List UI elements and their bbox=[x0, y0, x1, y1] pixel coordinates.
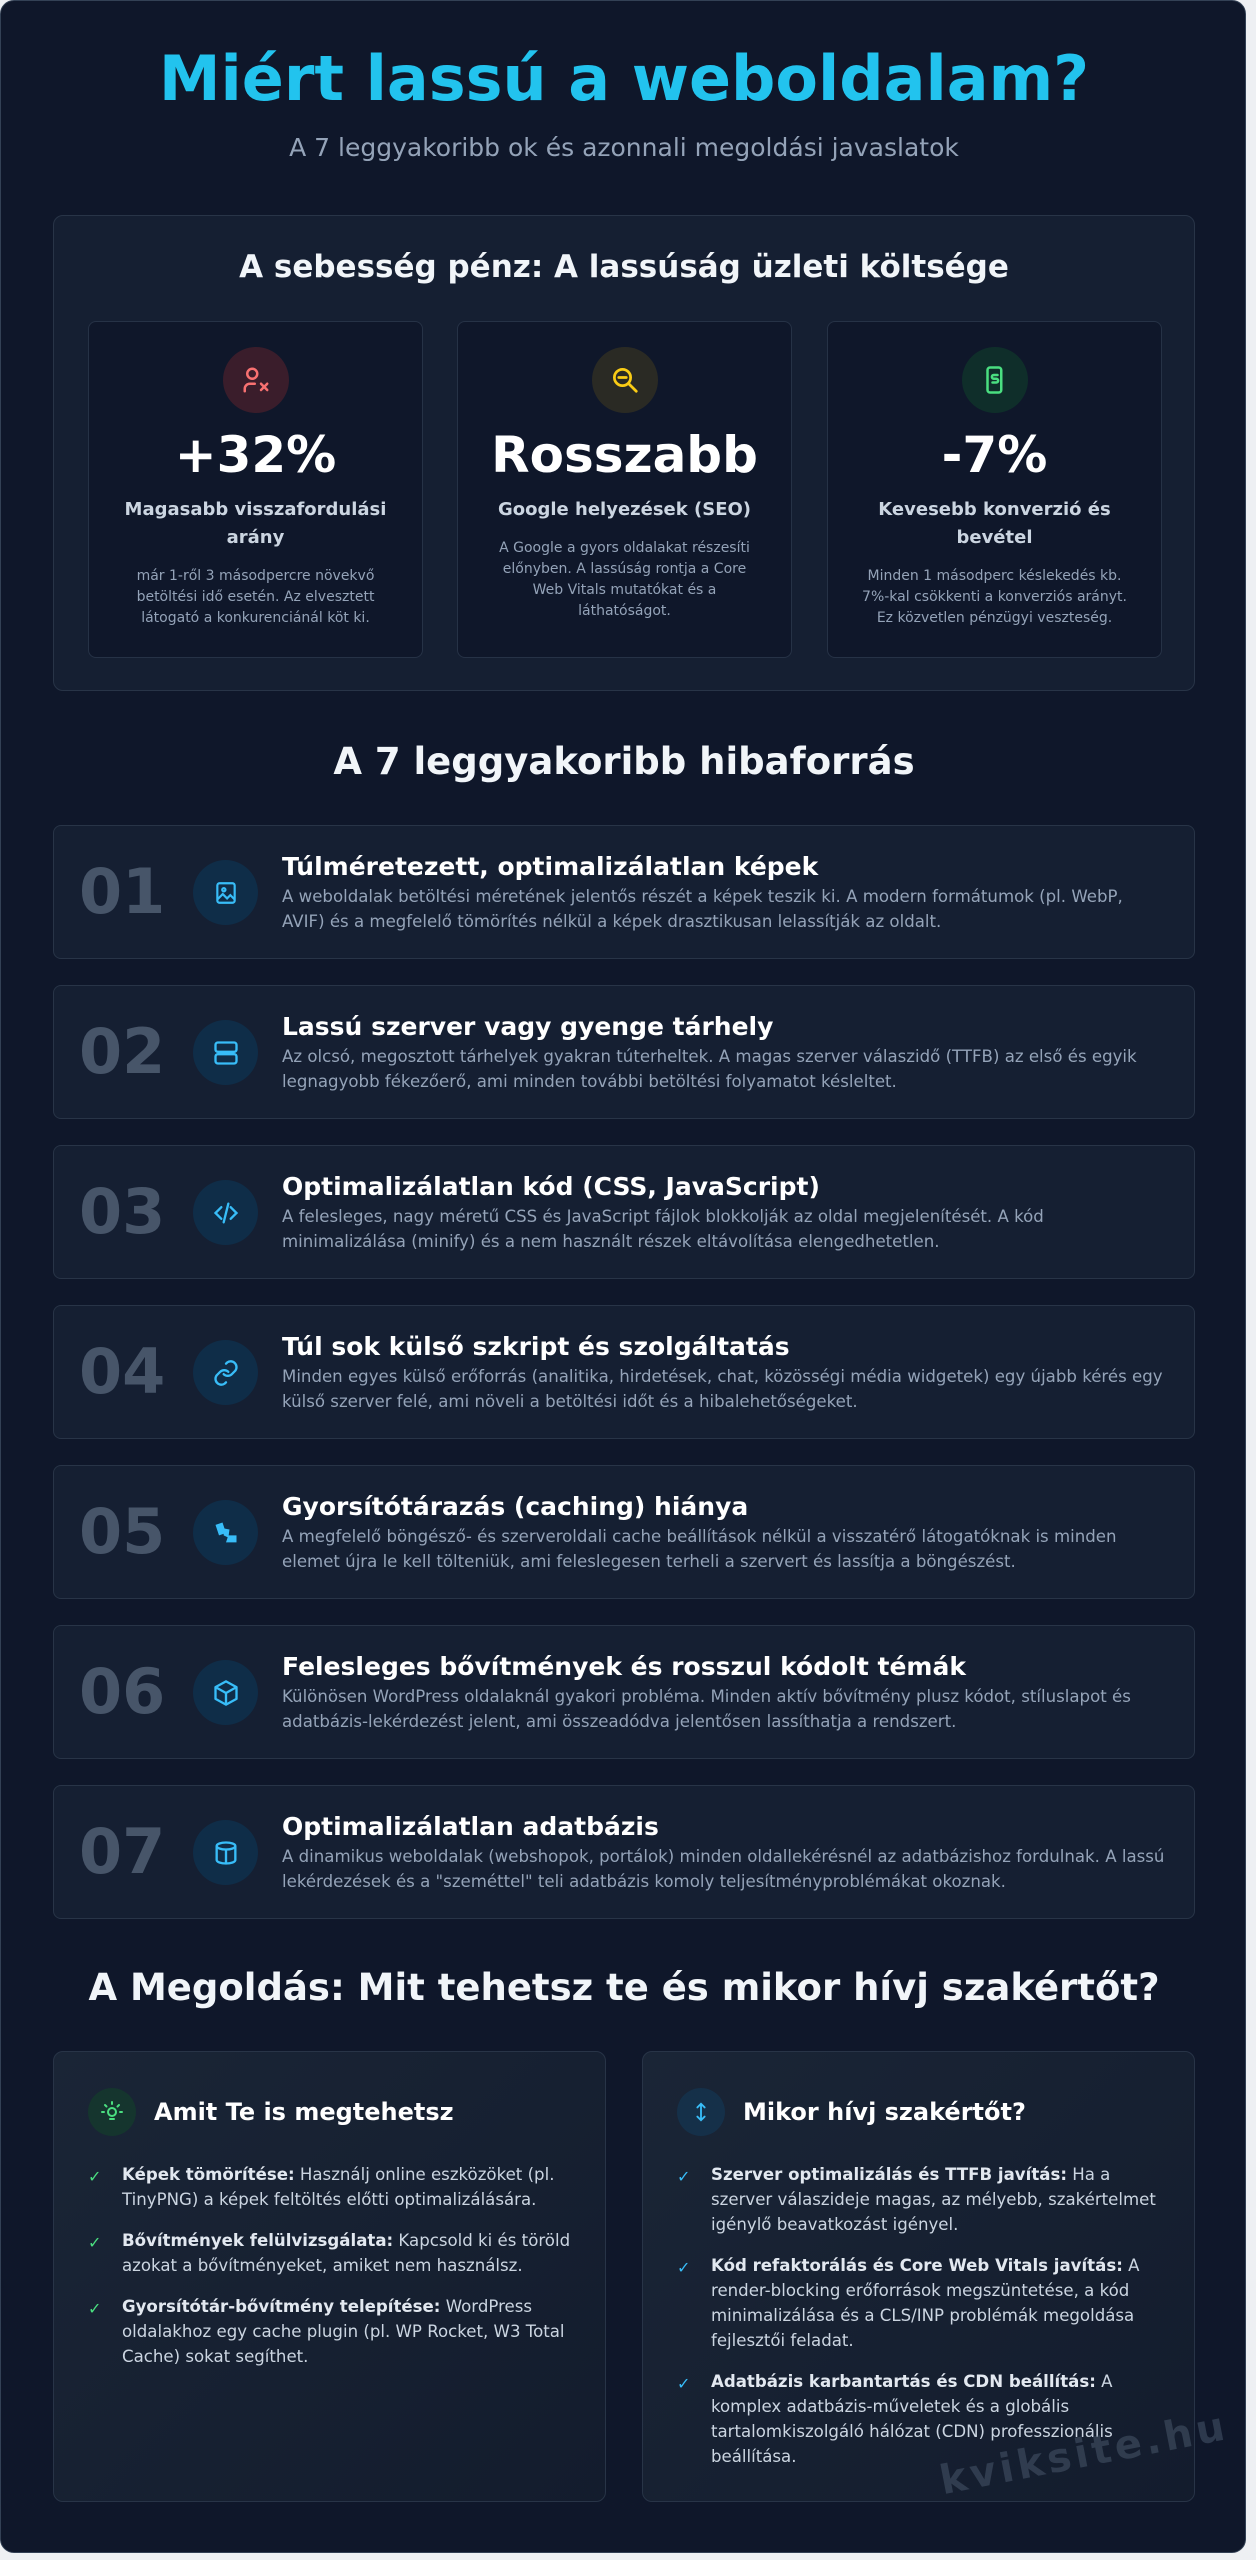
panel: expert: ✓ bbox=[677, 2374, 690, 2393]
item 05: 05 bbox=[79, 1495, 165, 1568]
icon: user x bbox=[223, 347, 289, 413]
item 03: Optimalizálatlan kód (CSS, JavaScript) bbox=[282, 1172, 820, 1201]
item 05: A megfelelő böngésző- és szerveroldali cache beállítások nélkül a visszatérő látogatóknak is minden elemet újra le kell tölteniük, ami feleslegesen terheli a szervert és lassítja a böngészést. bbox=[282, 1527, 1117, 1571]
icon: arrows bbox=[677, 2088, 725, 2136]
stat card: seo: Google helyezések (SEO) bbox=[498, 499, 751, 520]
item 01 bbox=[53, 825, 1195, 959]
item 01: Túlméretezett, optimalizálatlan képek bbox=[282, 852, 818, 881]
icon: image bbox=[193, 860, 258, 925]
stat card: bounce bbox=[88, 321, 423, 658]
item 04: 04 bbox=[79, 1335, 165, 1408]
stat card: bounce: már 1-ről 3 másodpercre növekvő betöltési idő esetén. Az elvesztett látogató a konkurenciánál köt ki. bbox=[137, 568, 374, 626]
panel: diy: ✓ bbox=[88, 2233, 101, 2252]
item 06: 06 bbox=[79, 1655, 165, 1728]
item 05: Gyorsítótárazás (caching) hiánya bbox=[282, 1492, 748, 1521]
stat card: bounce: +32% bbox=[175, 426, 336, 484]
item 07 bbox=[53, 1785, 1195, 1919]
item 01: 01 bbox=[79, 855, 165, 928]
stat card: conversion: -7% bbox=[942, 426, 1047, 484]
icon: bulb bbox=[88, 2088, 136, 2136]
panel: expert: Mikor hívj szakértőt? bbox=[743, 2098, 1026, 2126]
item 02: 02 bbox=[79, 1015, 165, 1088]
icon: code bbox=[193, 1180, 258, 1245]
item 04: Túl sok külső szkript és szolgáltatás bbox=[282, 1332, 790, 1361]
panel: diy: ✓ bbox=[88, 2167, 101, 2186]
item 02: Az olcsó, megosztott tárhelyek gyakran túterheltek. A magas szerver válaszidő (TTFB) az első és egyik legnagyobb fékezőerő, ami minden további betöltési folyamatot késleltet. bbox=[282, 1047, 1137, 1091]
subtitle: A 7 leggyakoribb ok és azonnali megoldási javaslatok bbox=[289, 133, 959, 162]
icon: phone money bbox=[962, 347, 1028, 413]
item 04 bbox=[53, 1305, 1195, 1439]
item 04: Minden egyes külső erőforrás (analitika, hirdetések, chat, közösségi média widgetek) egy újabb kérés egy külső szerver felé, ami növeli a betöltési időt és a hibalehetőségeket. bbox=[282, 1367, 1163, 1411]
watermark: kviksite.hu bbox=[936, 2403, 1232, 2504]
item 02 bbox=[53, 985, 1195, 1119]
panel: diy bbox=[53, 2051, 606, 2502]
panel: diy: Amit Te is megtehetsz bbox=[154, 2098, 454, 2126]
panel: expert: Kód refaktorálás és Core Web Vitals javítás: A render-blocking erőforrások megszüntetése, a kód minimalizálása és a CLS/INP problémák megoldása fejlesztői feladat. bbox=[711, 2256, 1139, 2350]
stat card: conversion: Minden 1 másodperc késlekedés kb. 7%-kal csökkenti a konverziós arányt. Ez közvetlen pénzügyi veszteség. bbox=[862, 568, 1127, 626]
item 03 bbox=[53, 1145, 1195, 1279]
icon: search minus bbox=[592, 347, 658, 413]
panel: expert: Adatbázis karbantartás és CDN beállítás: A komplex adatbázis-műveletek és a globális tartalomkiszolgáló hálózat (CDN) professzionális beállítása. bbox=[711, 2372, 1113, 2466]
icon: link bbox=[193, 1340, 258, 1405]
item 06: Különösen WordPress oldalaknál gyakori probléma. Minden aktív bővítmény plusz kódot, stíluslapot és adatbázis-lekérdezést jelent, ami összeadódva jelentősen lassíthatja a rendszert. bbox=[282, 1687, 1131, 1731]
icon: database bbox=[193, 1820, 258, 1885]
item 01: A weboldalak betöltési méretének jelentős részét a képek teszik ki. A modern formátumok (pl. WebP, AVIF) és a megfelelő tömörítés nélkül a képek drasztikusan lelassítják az oldalt. bbox=[282, 887, 1123, 931]
item 07: A dinamikus weboldalak (webshopok, portálok) minden oldallekérésnél az adatbázishoz fordulnak. A lassú lekérdezések és a "szeméttel" teli adatbázis komoly teljesítményproblémákat okoznak. bbox=[282, 1847, 1164, 1891]
item 07: Optimalizálatlan adatbázis bbox=[282, 1812, 659, 1841]
item 06: Felesleges bővítmények és rosszul kódolt témák bbox=[282, 1652, 966, 1681]
section heading: solution: A Megoldás: Mit tehetsz te és mikor hívj szakértőt? bbox=[88, 1966, 1160, 2009]
item 07: 07 bbox=[79, 1815, 165, 1888]
stat card: seo: A Google a gyors oldalakat részesíti előnyben. A lassúság rontja a Core Web Vitals mutatókat és a láthatóságot. bbox=[499, 540, 750, 619]
icon: server bbox=[193, 1020, 258, 1085]
panel: expert: ✓ bbox=[677, 2258, 690, 2277]
item 02: Lassú szerver vagy gyenge tárhely bbox=[282, 1012, 773, 1041]
title: Miért lassú a weboldalam? bbox=[159, 42, 1089, 115]
panel: business cost bbox=[53, 215, 1195, 691]
panel: diy: Gyorsítótár-bővítmény telepítése: WordPress oldalakhoz egy cache plugin (pl. WP Rocket, W3 Total Cache) sokat segíthet. bbox=[122, 2297, 565, 2366]
stat card: seo bbox=[457, 321, 792, 658]
panel: diy: ✓ bbox=[88, 2299, 101, 2318]
panel: expert: Szerver optimalizálás és TTFB javítás: Ha a szerver válaszideje magas, az mélyebb, szakértelmet igénylő beavatkozást igényel. bbox=[711, 2165, 1156, 2234]
panel: diy: Bővítmények felülvizsgálata: Kapcsold ki és töröld azokat a bővítményeket, amiket nem használsz. bbox=[122, 2231, 570, 2275]
item 03: 03 bbox=[79, 1175, 165, 1248]
section heading: causes: A 7 leggyakoribb hibaforrás bbox=[333, 740, 915, 783]
stat card: seo: Rosszabb bbox=[491, 426, 758, 484]
panel: diy: Képek tömörítése: Használj online eszközöket (pl. TinyPNG) a képek feltöltés előtti optimalizálására. bbox=[122, 2165, 554, 2209]
item 05 bbox=[53, 1465, 1195, 1599]
stat card: conversion: Kevesebb konverzió és bevétel bbox=[878, 499, 1111, 548]
item 03: A felesleges, nagy méretű CSS és JavaScript fájlok blokkolják az oldal megjelenítését. A kód minimalizálása (minify) és a nem használt részek eltávolítása elengedhetetlen. bbox=[282, 1207, 1044, 1251]
icon: cache swatches bbox=[193, 1500, 258, 1565]
panel heading: A sebesség pénz: A lassúság üzleti költsége bbox=[239, 249, 1009, 285]
stat card: bounce: Magasabb visszafordulási arány bbox=[125, 499, 386, 548]
panel: expert bbox=[642, 2051, 1195, 2502]
stat card: conversion bbox=[827, 321, 1162, 658]
item 06 bbox=[53, 1625, 1195, 1759]
panel: expert: ✓ bbox=[677, 2167, 690, 2186]
icon: cube bbox=[193, 1660, 258, 1725]
